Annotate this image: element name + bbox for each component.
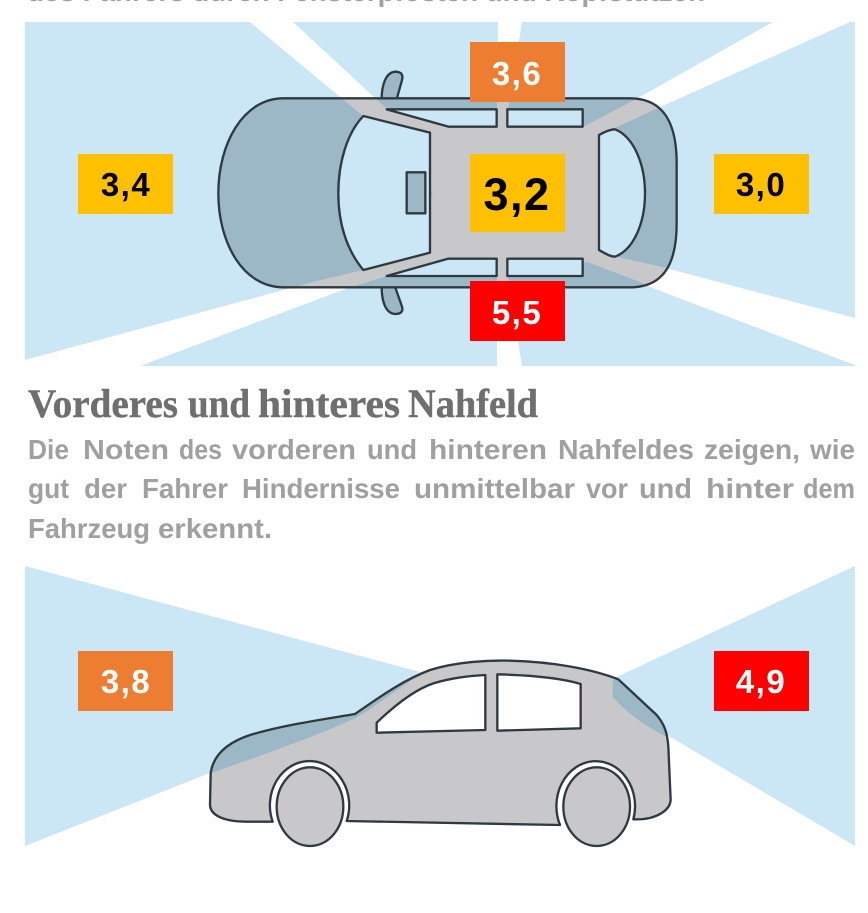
body text block: Die — [28, 434, 69, 465]
body text block: und — [639, 473, 692, 504]
body text block: Hindernisse — [242, 473, 400, 504]
body text block: unmittelbar — [414, 473, 575, 504]
heading: Vorderes — [28, 381, 178, 426]
body text block: wie — [809, 434, 855, 465]
grade box: front near field 3,8: 3,8 — [101, 663, 151, 700]
sight fields overlapping the car body — [220, 100, 676, 286]
rear near-field sight cone — [610, 566, 855, 846]
rear wheel — [563, 767, 630, 846]
grade box: rear near field 4,9: 4,9 — [736, 663, 786, 700]
body text block: des — [179, 434, 222, 465]
icon: car seen from the side — [208, 659, 672, 848]
body text block: der — [84, 473, 127, 504]
blue sight fields around the car — [25, 22, 855, 366]
body text block: erkennt. — [158, 513, 272, 544]
grade box: overall 3,2 — [470, 154, 565, 232]
grade box: overall 3,2: 3,2 — [483, 169, 551, 220]
side car body — [210, 661, 671, 825]
front wheel — [277, 767, 343, 846]
body text block: Fahrzeug — [28, 513, 150, 544]
car body — [218, 98, 677, 287]
grade box: rear 3,0: 3,0 — [736, 166, 786, 203]
body text block: Noten — [83, 434, 169, 465]
body text block: Fahrer — [142, 473, 228, 504]
sight field overlaps on the car body — [212, 676, 666, 773]
heading — [28, 381, 538, 426]
grade box: right side 3,6: 3,6 — [492, 55, 542, 92]
body text block: zeigen, — [704, 434, 800, 465]
body text block: und — [367, 434, 417, 465]
rear side window — [497, 674, 581, 731]
body text block: hinteren — [429, 434, 547, 465]
grade box: rear 3,0 — [714, 154, 809, 214]
side car outline — [210, 661, 671, 825]
body text block: vorderen — [232, 434, 356, 465]
body text block: gut — [28, 473, 69, 504]
icon: car seen from above — [217, 70, 678, 316]
front near-field sight cone — [25, 566, 420, 846]
heading: hinteres — [258, 381, 400, 426]
grade box: front 3,4: 3,4 — [101, 166, 151, 203]
grade box: rear near field 4,9 — [714, 651, 809, 711]
heading: Nahfeld — [408, 381, 538, 426]
panel: top view of visibility — [25, 22, 855, 366]
grade box: right side 3,6 — [470, 42, 565, 102]
front side window — [377, 675, 485, 733]
body text block: vor — [586, 473, 628, 504]
car outline and windows — [218, 98, 677, 287]
body text block: hinter — [706, 473, 794, 504]
grade box: front 3,4 — [78, 154, 173, 214]
body text block: Nahfeldes — [558, 434, 694, 465]
grade box: left side 5,5: 5,5 — [492, 294, 542, 331]
body text block: dem — [803, 473, 855, 504]
grade box: front near field 3,8 — [78, 651, 173, 711]
body text block — [28, 434, 855, 544]
panel: side view of near field — [25, 566, 855, 846]
heading: und — [188, 381, 250, 426]
grade box: left side 5,5 — [470, 281, 565, 341]
car mirrors — [382, 72, 402, 314]
